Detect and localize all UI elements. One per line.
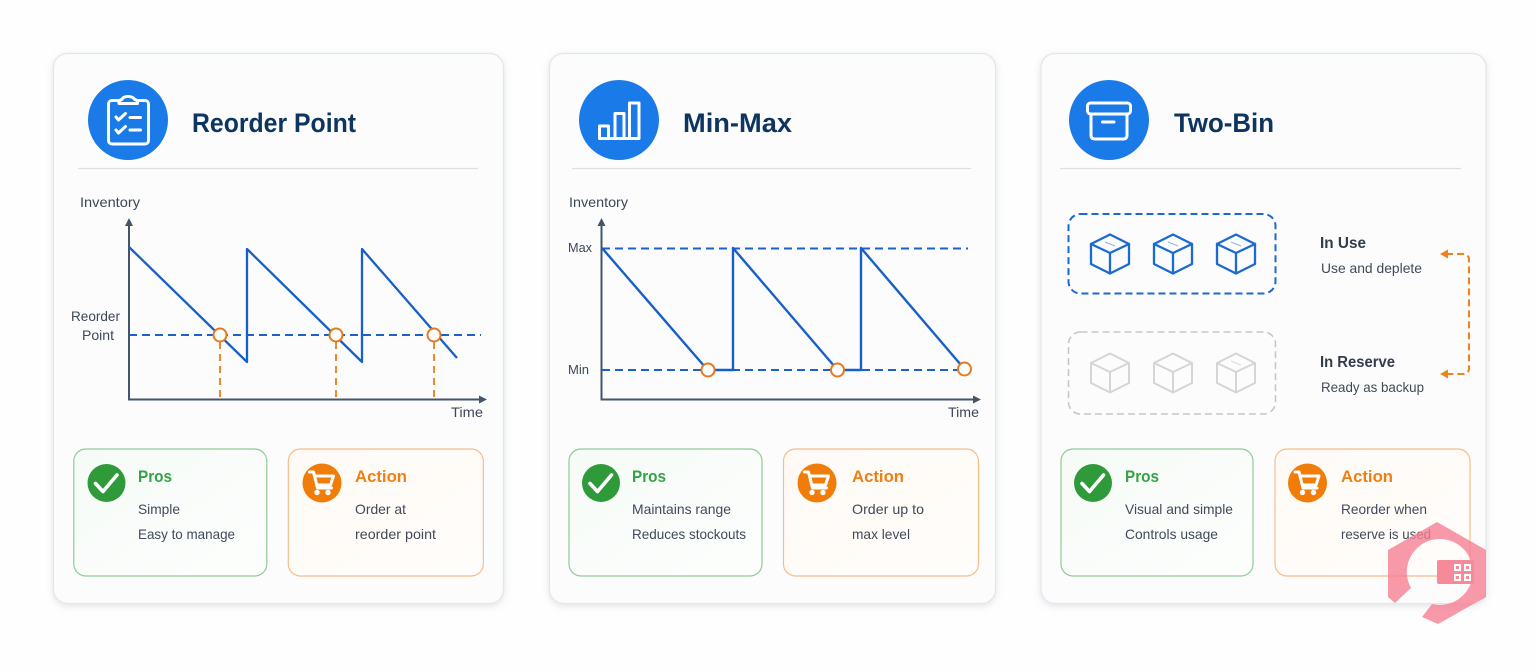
watermark badge [1388, 522, 1486, 624]
callout: action: Order up to [852, 501, 924, 517]
icon: bar chart [579, 80, 659, 160]
callout: action [288, 449, 483, 576]
callout: action: max level [852, 526, 910, 542]
callout: action: Action [1341, 467, 1393, 486]
chart: reorder point sawtooth: Reorder [71, 308, 120, 324]
panel: Two-Bin [1041, 0, 1486, 604]
bin: in reserve [1068, 332, 1276, 414]
text: in reserve [1320, 354, 1424, 395]
text: in use: In Use [1320, 235, 1366, 252]
callout: pros: Controls usage [1125, 526, 1218, 542]
heading: Two-Bin [1174, 108, 1274, 138]
callout: pros [569, 449, 762, 576]
callout: action: Action [852, 467, 904, 486]
callout: pros [1061, 449, 1253, 576]
callout: pros: Pros [632, 467, 666, 486]
callout: action [1275, 449, 1470, 576]
text: in use: Use and deplete [1321, 260, 1422, 276]
callout: pros: Easy to manage [138, 526, 235, 542]
text: in reserve: In Reserve [1320, 354, 1395, 371]
chart: reorder point sawtooth: Time [451, 404, 483, 420]
heading: Reorder Point [192, 108, 356, 138]
icon: clipboard checklist [88, 80, 168, 160]
callout: action: Action [355, 467, 407, 486]
chart: reorder point sawtooth: Inventory [80, 194, 140, 210]
chart: min-max sawtooth: Inventory [569, 194, 628, 210]
bin: in use [1068, 0, 1276, 294]
callout: pros [74, 449, 267, 576]
callout: pros: Simple [138, 501, 180, 517]
heading: Min-Max [683, 108, 792, 138]
icon: archive box [1069, 80, 1149, 160]
chart: min-max sawtooth: Time [948, 404, 979, 420]
callout: action: reserve is used [1341, 526, 1431, 542]
text: in use [1320, 235, 1422, 276]
callout: action: reorder point [355, 526, 436, 542]
callout: pros: Pros [138, 467, 172, 486]
panel: Reorder Point [54, 54, 504, 604]
chart: reorder point sawtooth [71, 194, 487, 420]
callout: action [784, 449, 978, 576]
chart: min-max sawtooth [568, 194, 981, 420]
callout: pros: Pros [1125, 467, 1159, 486]
text: in reserve: Ready as backup [1321, 379, 1424, 395]
chart: min-max sawtooth: Min [568, 363, 589, 377]
callout: pros: Reduces stockouts [632, 526, 746, 542]
callout: pros: Maintains range [632, 501, 731, 517]
callout: action: Order at [355, 501, 406, 517]
chart: reorder point sawtooth: Point [82, 327, 114, 343]
chart: min-max sawtooth: Max [568, 241, 593, 255]
arrow: swap bins [1440, 250, 1469, 378]
callout: pros: Visual and simple [1125, 501, 1233, 517]
callout: action: Reorder when [1341, 501, 1427, 517]
panel: Min-Max [550, 54, 996, 604]
